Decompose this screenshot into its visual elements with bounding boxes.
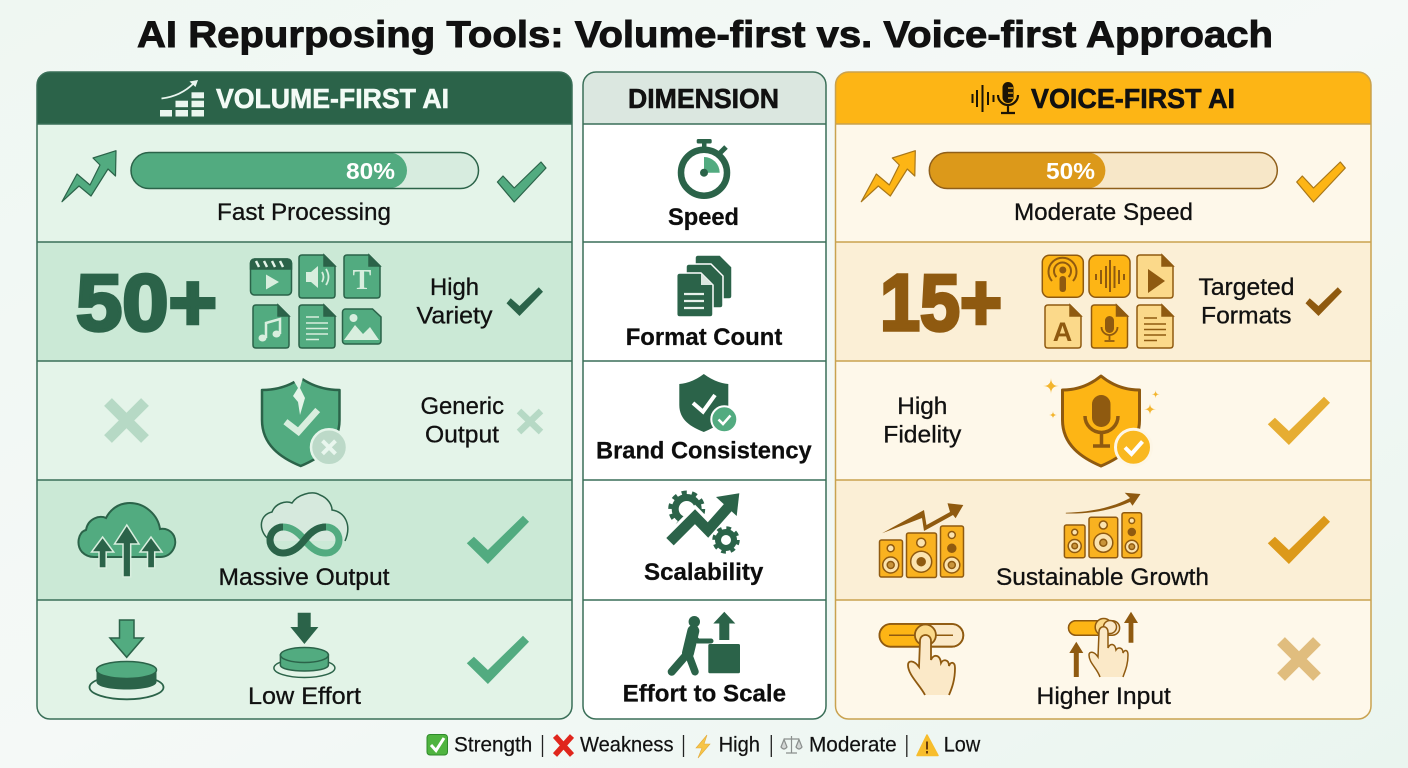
label: Massive Output [218,564,390,591]
check [467,636,529,684]
icon: slider with finger [879,624,963,695]
check [1297,162,1345,202]
icon: gears and arrow [669,493,739,552]
volume-first header [160,80,449,116]
icon: text file: T [353,265,372,296]
icon: speakers with zigzag arrow [880,503,964,578]
icon: shield check [679,374,737,432]
dimension heading: DIMENSION [628,83,779,114]
icon: stopwatch [681,139,727,196]
icon: cross [1281,641,1317,677]
legend: weakness: Weakness [580,733,674,757]
icon: red cross [555,736,572,755]
icon: waveform and microphone [972,82,1018,113]
check [1306,287,1342,316]
dimension: brand consistency [596,374,812,464]
icon: slider with arrows [1069,612,1138,677]
format icons [250,255,381,348]
row: massive output [79,493,529,591]
icon: stacked documents [677,255,732,317]
label: Speed [668,204,739,231]
row: 15+ formats [880,255,1342,348]
legend: strength: Strength [454,733,532,757]
icon: press button [90,620,164,699]
icon: podcast [1042,255,1083,297]
big number: 50+ [76,258,217,347]
check [506,287,543,316]
label [416,274,492,329]
icon: waveform tile [1089,255,1130,297]
label: High [430,274,479,301]
panel: volume-first AI [37,72,572,719]
label: Fidelity [883,422,961,449]
icon: speakers with growth curve [1064,493,1142,558]
label: Scalability [644,559,764,586]
icon: person pushing box [672,612,740,673]
progress bar 50%: 50% [1046,158,1095,184]
label: Formats [1201,302,1292,329]
progress bar 80% [131,152,478,188]
label [883,393,961,449]
row: 50+ formats [76,255,543,348]
panel: dimension [583,72,826,719]
row: moderate speed [861,151,1345,226]
label: Effort to Scale [623,681,786,708]
icon: microphone file [1092,305,1128,348]
label: Low Effort [248,683,361,710]
label: Generic [420,393,504,420]
row: low effort [90,613,529,710]
row: generic output [108,374,541,466]
panel: voice-first AI [835,72,1372,719]
title: AI Repurposing Tools: Volume-first vs. Voice-first Approach [137,14,1273,55]
icon: video [250,259,292,295]
icon: cloud with arrows [79,503,175,577]
label: Targeted [1198,274,1294,301]
icon: lightning bolt [696,735,710,758]
label [420,393,504,449]
legend: low: Low [944,733,981,757]
icon: play file [1137,255,1173,298]
progress bar 50% [929,152,1277,188]
icon: green check box [427,734,448,755]
label: Variety [416,302,492,329]
label: Moderate Speed [1014,199,1193,226]
icon: image [342,309,381,344]
icon: cross [108,402,145,439]
icon: audio file [299,255,335,298]
icon: microphone shield [1043,376,1160,466]
icon: small press button [274,613,335,678]
big number: 15+ [880,258,1002,347]
icon: document file [1137,305,1173,348]
check [1268,516,1330,564]
label: Higher Input [1036,683,1171,710]
dimension: format count [626,255,782,351]
progress bar 80%: 80% [346,158,395,184]
dimension: speed [668,139,739,231]
label: Fast Processing [217,199,391,226]
icon: letter file: A [1053,317,1072,347]
check [467,516,529,564]
icon: cracked shield [262,374,347,466]
voice-first heading: VOICE-FIRST AI [1031,83,1235,114]
label: High [897,393,947,420]
row: high fidelity [883,376,1330,466]
legend: moderate: Moderate [809,733,897,757]
icon: infinity cloud [261,493,348,553]
legend [427,733,981,758]
row: sustainable growth [880,493,1330,591]
label: Output [425,422,499,449]
legend: high: High [719,733,760,757]
dimension: effort to scale [623,612,786,708]
icon: zigzag arrow [62,151,116,202]
row: higher input [879,612,1317,710]
format icons [1042,255,1173,348]
icon: small cross [519,411,541,432]
check [1268,397,1330,445]
row: fast processing [62,151,546,226]
icon: balance scale [781,736,802,753]
check [497,162,546,202]
label: Brand Consistency [596,437,812,464]
voice-first header [972,82,1235,114]
icon: zigzag arrow [861,151,915,202]
label [1198,274,1294,329]
icon: rising bars [160,80,204,116]
icon: music file [253,305,289,348]
volume-first heading: VOLUME-FIRST AI [216,83,449,114]
icon: warning triangle [917,735,938,756]
icon: document file [299,305,335,348]
dimension: scalability [644,493,764,586]
label: Sustainable Growth [996,564,1209,591]
label: Format Count [626,324,782,351]
